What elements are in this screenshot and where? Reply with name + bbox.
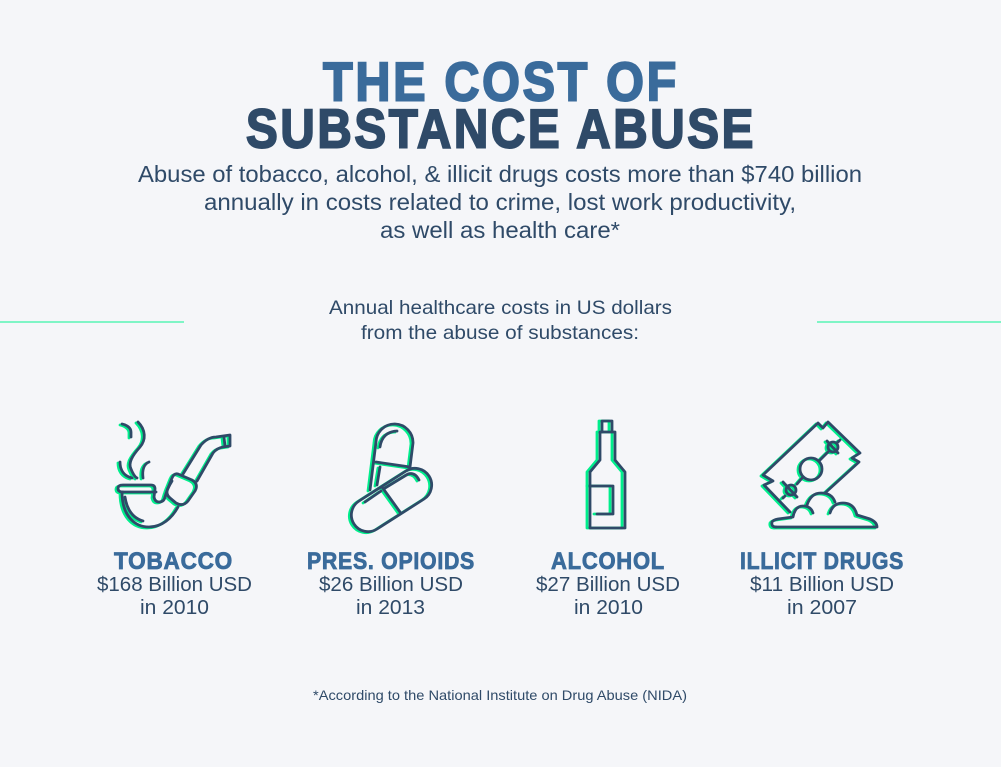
- panel: tobacco: [97, 422, 252, 619]
- panel: prescription opioids: [307, 424, 475, 619]
- icon: pills: [349, 424, 432, 533]
- icon: bottle: [587, 421, 625, 528]
- illicit drugs heading: ILLICIT DRUGS: [740, 548, 904, 575]
- tobacco cost: $168 Billion USD: [97, 574, 252, 596]
- tobacco heading: TOBACCO: [114, 548, 233, 575]
- alcohol cost: $27 Billion USD: [536, 574, 680, 596]
- illicit drugs year: in 2007: [787, 597, 857, 619]
- alcohol year: in 2010: [574, 597, 643, 619]
- divider right: [817, 321, 1001, 323]
- intro text: as well as health care*: [380, 217, 620, 243]
- panel: alcohol: [536, 421, 680, 619]
- icon: pipe: [116, 422, 230, 528]
- title: [246, 50, 756, 160]
- section subheading: from the abuse of substances:: [361, 322, 639, 344]
- title line 1: THE COST OF: [323, 50, 679, 112]
- opioids cost: $26 Billion USD: [319, 574, 463, 596]
- title line 2: SUBSTANCE ABUSE: [246, 98, 756, 160]
- opioids heading: PRES. OPIOIDS: [307, 548, 475, 575]
- footnote: *According to the National Institute on Drug Abuse (NIDA): [313, 687, 687, 703]
- section subheading: [329, 297, 672, 344]
- illicit drugs cost: $11 Billion USD: [750, 574, 894, 596]
- intro text: annually in costs related to crime, lost work productivity,: [204, 189, 796, 215]
- icon: drugs: [761, 422, 877, 528]
- tobacco year: in 2010: [140, 597, 209, 619]
- intro text: Abuse of tobacco, alcohol, & illicit drugs costs more than $740 billion: [138, 161, 862, 187]
- alcohol heading: ALCOHOL: [551, 548, 665, 575]
- opioids year: in 2013: [356, 597, 425, 619]
- intro text: [138, 161, 862, 243]
- panel: illicit drugs: [740, 422, 904, 619]
- divider left: [0, 321, 184, 323]
- section subheading: Annual healthcare costs in US dollars: [329, 297, 672, 319]
